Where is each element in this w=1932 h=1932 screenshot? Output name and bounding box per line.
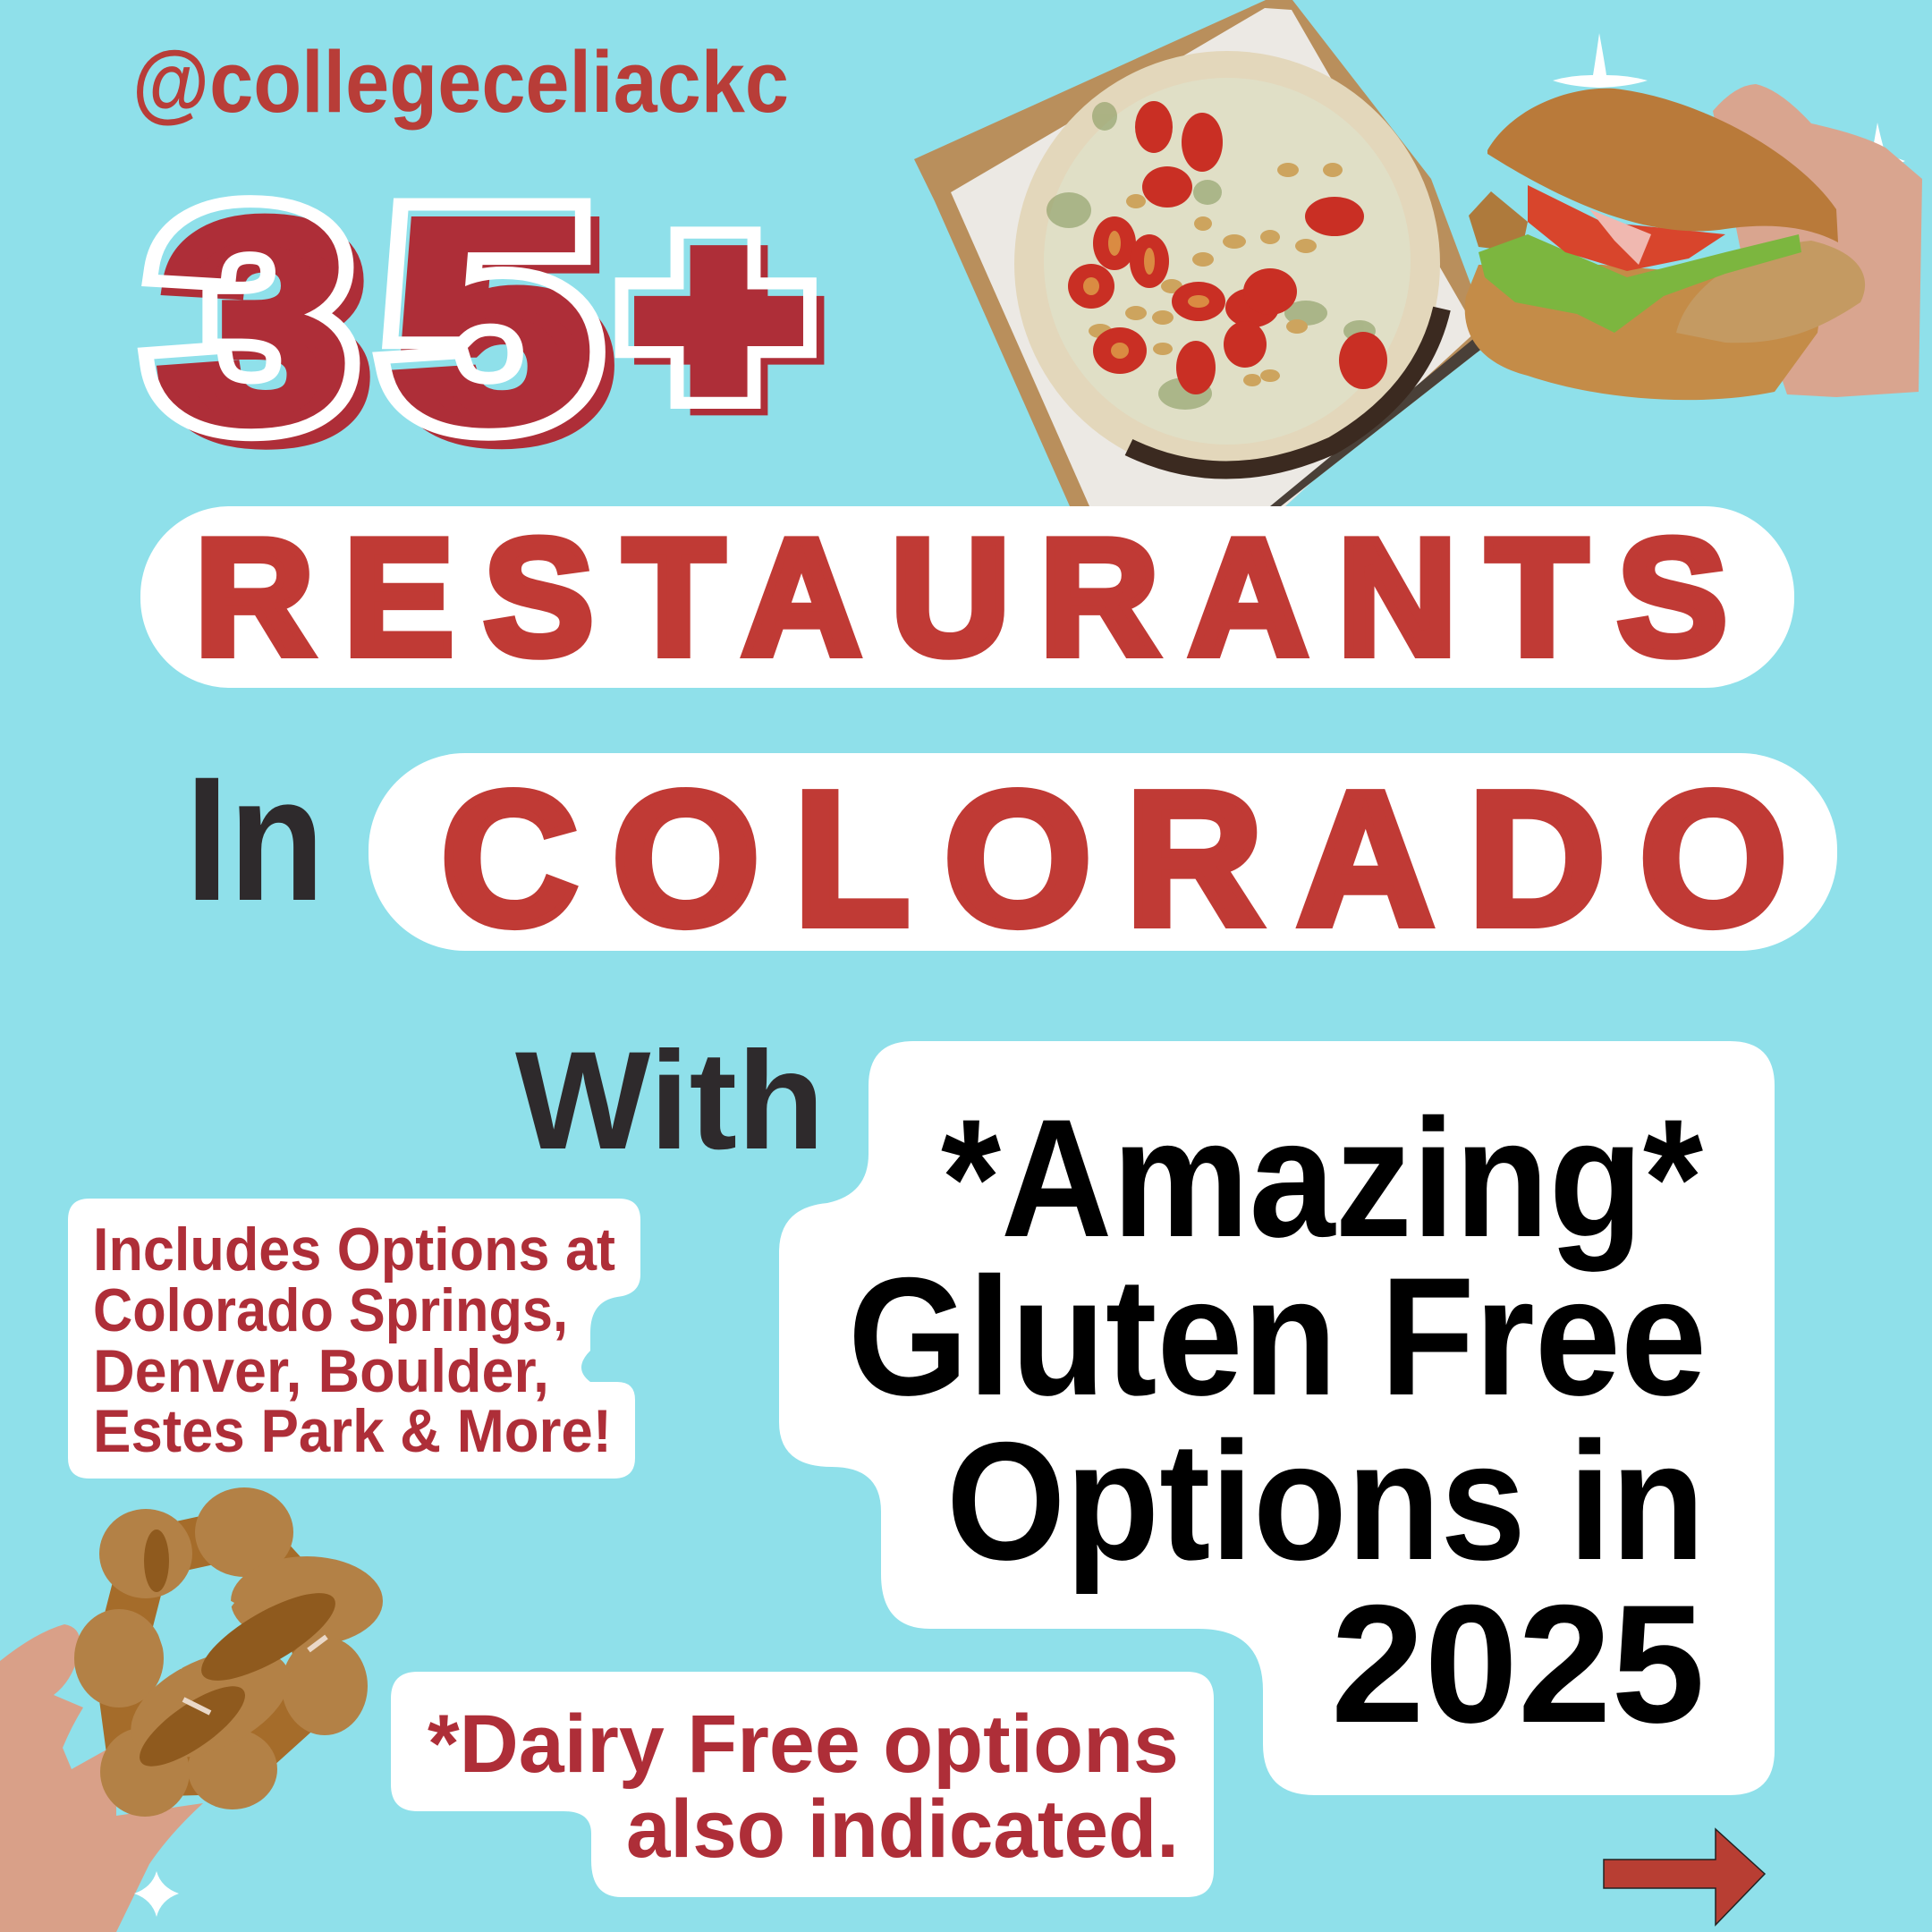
callout: included cities: Denver, Boulder,: [93, 1337, 549, 1405]
handle: @collegeceliackc: @collegeceliackc: [132, 33, 789, 131]
image: pizza in box: [914, 0, 1492, 506]
callout: dairy free: *Dairy Free options: [428, 1699, 1179, 1790]
panel: Amazing Gluten Free Options in 2025: 2025: [1331, 1570, 1705, 1758]
panel: Amazing Gluten Free Options in 2025: Gluten Free: [848, 1242, 1707, 1430]
panel: Amazing Gluten Free Options in 2025: Options in: [946, 1407, 1705, 1595]
pill: RESTAURANTS: RESTAURANTS: [195, 504, 1727, 689]
icon: top sparkle: [1553, 33, 1905, 170]
callout: dairy free: also indicated.: [626, 1784, 1179, 1875]
text: With: With: [515, 1023, 825, 1179]
heading: 35+: 5: [399, 166, 608, 496]
callout: dairy free: [391, 1672, 1214, 1897]
image: chicken sandwich in hand: [1465, 84, 1922, 400]
callout: included cities: Estes Park & More!: [93, 1397, 612, 1465]
pill: COLORADO: COLORADO: [441, 752, 1787, 964]
icon: bottom sparkle: [134, 1871, 179, 1917]
callout: included cities: Includes Options at: [93, 1216, 615, 1284]
heading: 35+: 3: [166, 166, 367, 496]
text: In: In: [185, 740, 325, 937]
callout: included cities: [68, 1199, 640, 1479]
image: cinnamon donut in hand: [0, 1487, 383, 1932]
callout: included cities: Colorado Springs,: [93, 1276, 568, 1344]
heading: 35+: +: [645, 185, 813, 470]
heading: 35+: [138, 195, 825, 450]
panel: Amazing Gluten Free Options in 2025: *Amazing*: [941, 1084, 1703, 1272]
panel: Amazing Gluten Free Options in 2025: [779, 1041, 1775, 1795]
arrow: [1604, 1829, 1765, 1925]
